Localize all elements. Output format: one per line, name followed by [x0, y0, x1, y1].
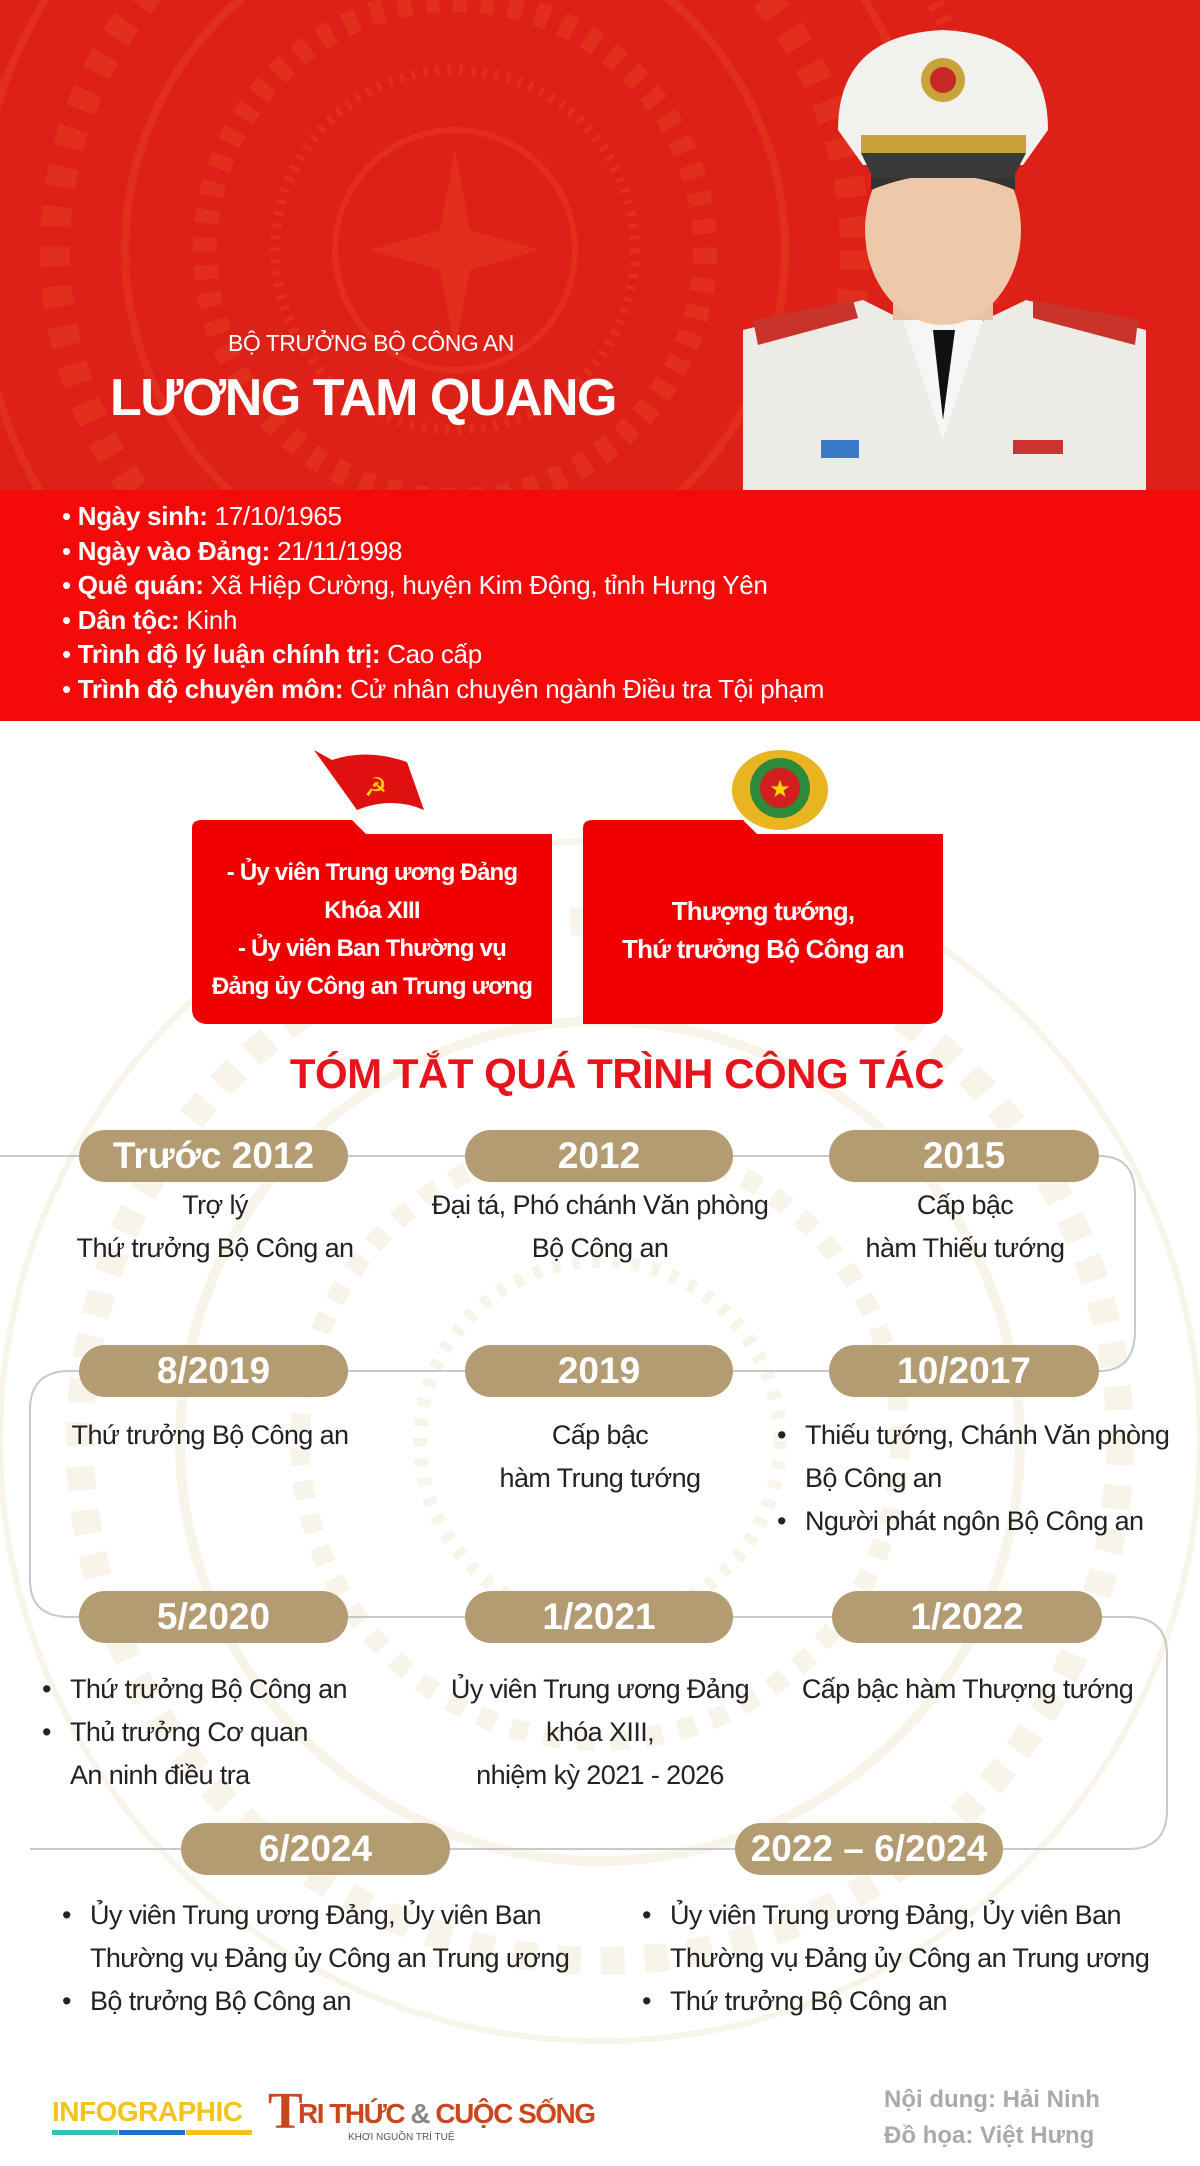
box: party positions: - Ủy viên Ban Thường vụ [238, 935, 506, 962]
icon: party flag: ☭ [364, 773, 387, 803]
timeline item: 5/2020 [43, 1591, 348, 1790]
timeline item: 10/2017: Thiếu tướng, Chánh Văn phòng [805, 1420, 1169, 1450]
timeline item: 10/2017: Người phát ngôn Bộ Công an [805, 1506, 1143, 1536]
timeline item: 6/2024: Ủy viên Trung ương Đảng, Ủy viên Ban [90, 1900, 541, 1930]
timeline item: 2012: Bộ Công an [532, 1233, 668, 1263]
info rows: • Trình độ lý luận chính trị: Cao cấp [62, 639, 482, 669]
timeline item: 1/2022 [802, 1591, 1133, 1704]
timeline item: 2022 – 6/2024: Thứ trưởng Bộ Công an [670, 1986, 947, 2016]
info rows [62, 501, 824, 704]
personal info band [0, 490, 1200, 721]
timeline item: 6/2024 [63, 1823, 569, 2016]
timeline item: 6/2024: 6/2024 [259, 1828, 372, 1869]
timeline item: 2022 – 6/2024: Thường vụ Đảng ủy Công an Trung ương [670, 1943, 1149, 1973]
timeline item: 10/2017: 10/2017 [897, 1350, 1031, 1391]
timeline item: 1/2022: Cấp bậc hàm Thượng tướng [802, 1674, 1133, 1704]
timeline item: 1/2021: nhiệm kỳ 2021 - 2026 [476, 1760, 724, 1790]
name heading: LƯƠNG TAM QUANG [110, 369, 616, 427]
portrait photo [743, 30, 1146, 490]
background drum pattern [0, 838, 1200, 2044]
timeline item: 8/2019: 8/2019 [157, 1350, 270, 1391]
timeline item: 2015: hàm Thiếu tướng [866, 1233, 1064, 1263]
icon: police emblem [732, 750, 828, 830]
info rows: • Trình độ chuyên môn: Cử nhân chuyên ngành Điều tra Tội phạm [62, 674, 824, 704]
timeline item: 1/2021: khóa XIII, [546, 1717, 654, 1747]
info rows: • Ngày vào Đảng: 21/11/1998 [62, 536, 402, 566]
timeline item: 5/2020: Thủ trưởng Cơ quan [70, 1717, 308, 1747]
icon: party flag [314, 750, 424, 810]
footer: credits: Đồ họa: Việt Hưng [884, 2122, 1094, 2149]
timeline item: 10/2017 [778, 1345, 1169, 1536]
footer: publisher logo: RI THỨC & CUỘC SỐNG [298, 2098, 595, 2129]
box: rank: Thứ trưởng Bộ Công an [622, 934, 904, 964]
footer: infographic label: INFOGRAPHIC [52, 2096, 242, 2127]
timeline item: 10/2017: Bộ Công an [805, 1463, 942, 1493]
timeline item: 2022 – 6/2024: Ủy viên Trung ương Đảng, Ủy viên Ban [670, 1900, 1121, 1930]
header background [0, 0, 1200, 490]
box: party positions: Khóa XIII [324, 897, 420, 924]
timeline item: 8/2019: Thứ trưởng Bộ Công an [72, 1420, 348, 1450]
box: party positions [192, 820, 552, 1024]
timeline item: 2012: 2012 [558, 1135, 640, 1176]
footer: credits: Nội dung: Hải Ninh [884, 2086, 1100, 2113]
timeline item: 2019: 2019 [558, 1350, 640, 1391]
box: party positions: Đảng ủy Công an Trung ương [212, 973, 532, 1000]
timeline item: 2012 [432, 1130, 768, 1263]
timeline item: 2022 – 6/2024 [643, 1823, 1149, 2016]
timeline item: 2012: Đại tá, Phó chánh Văn phòng [432, 1190, 768, 1220]
timeline item: 2019: hàm Trung tướng [500, 1463, 700, 1493]
timeline item: 1/2022: 1/2022 [910, 1596, 1024, 1637]
timeline item: 1/2021 [451, 1591, 749, 1790]
footer: publisher logo: T [268, 2083, 303, 2140]
timeline item: 8/2019 [72, 1345, 348, 1450]
timeline item: 2022 – 6/2024: 2022 – 6/2024 [751, 1828, 987, 1869]
timeline item: 1/2021: 1/2021 [542, 1596, 656, 1637]
timeline item: Trước 2012 [77, 1130, 353, 1263]
footer: publisher logo: KHƠI NGUỒN TRÍ TUỆ [348, 2132, 455, 2143]
timeline item: 5/2020: An ninh điều tra [70, 1760, 250, 1790]
timeline item: 1/2021: Ủy viên Trung ương Đảng [451, 1674, 749, 1704]
subtitle: BỘ TRƯỞNG BỘ CÔNG AN [228, 330, 514, 356]
timeline item: Trước 2012: Thứ trưởng Bộ Công an [77, 1233, 353, 1263]
footer: publisher logo [268, 2083, 595, 2143]
timeline item: 6/2024: Bộ trưởng Bộ Công an [90, 1986, 351, 2016]
box: rank [583, 820, 943, 1024]
info rows: • Ngày sinh: 17/10/1965 [62, 501, 342, 531]
timeline item: 2015 [829, 1130, 1099, 1263]
box: party positions: - Ủy viên Trung ương Đảng [227, 859, 517, 886]
timeline item: 2019: Cấp bậc [552, 1420, 648, 1450]
timeline item: 2019 [465, 1345, 733, 1493]
timeline item: Trước 2012: Trước 2012 [113, 1135, 314, 1176]
timeline item: 2015: Cấp bậc [917, 1190, 1013, 1220]
info rows: • Quê quán: Xã Hiệp Cường, huyện Kim Động, tỉnh Hưng Yên [62, 570, 768, 600]
box: rank: Thượng tướng, [672, 896, 854, 926]
timeline item: 5/2020: Thứ trưởng Bộ Công an [70, 1674, 347, 1704]
info rows: • Dân tộc: Kinh [62, 605, 237, 635]
section title: TÓM TẮT QUÁ TRÌNH CÔNG TÁC [290, 1050, 944, 1097]
timeline item: 2015: 2015 [923, 1135, 1005, 1176]
timeline item: 5/2020: 5/2020 [157, 1596, 270, 1637]
icon: police emblem: ★ [769, 775, 791, 803]
timeline item: 6/2024: Thường vụ Đảng ủy Công an Trung ương [90, 1943, 569, 1973]
timeline item: Trước 2012: Trợ lý [182, 1190, 248, 1220]
footer: credits [884, 2086, 1100, 2149]
